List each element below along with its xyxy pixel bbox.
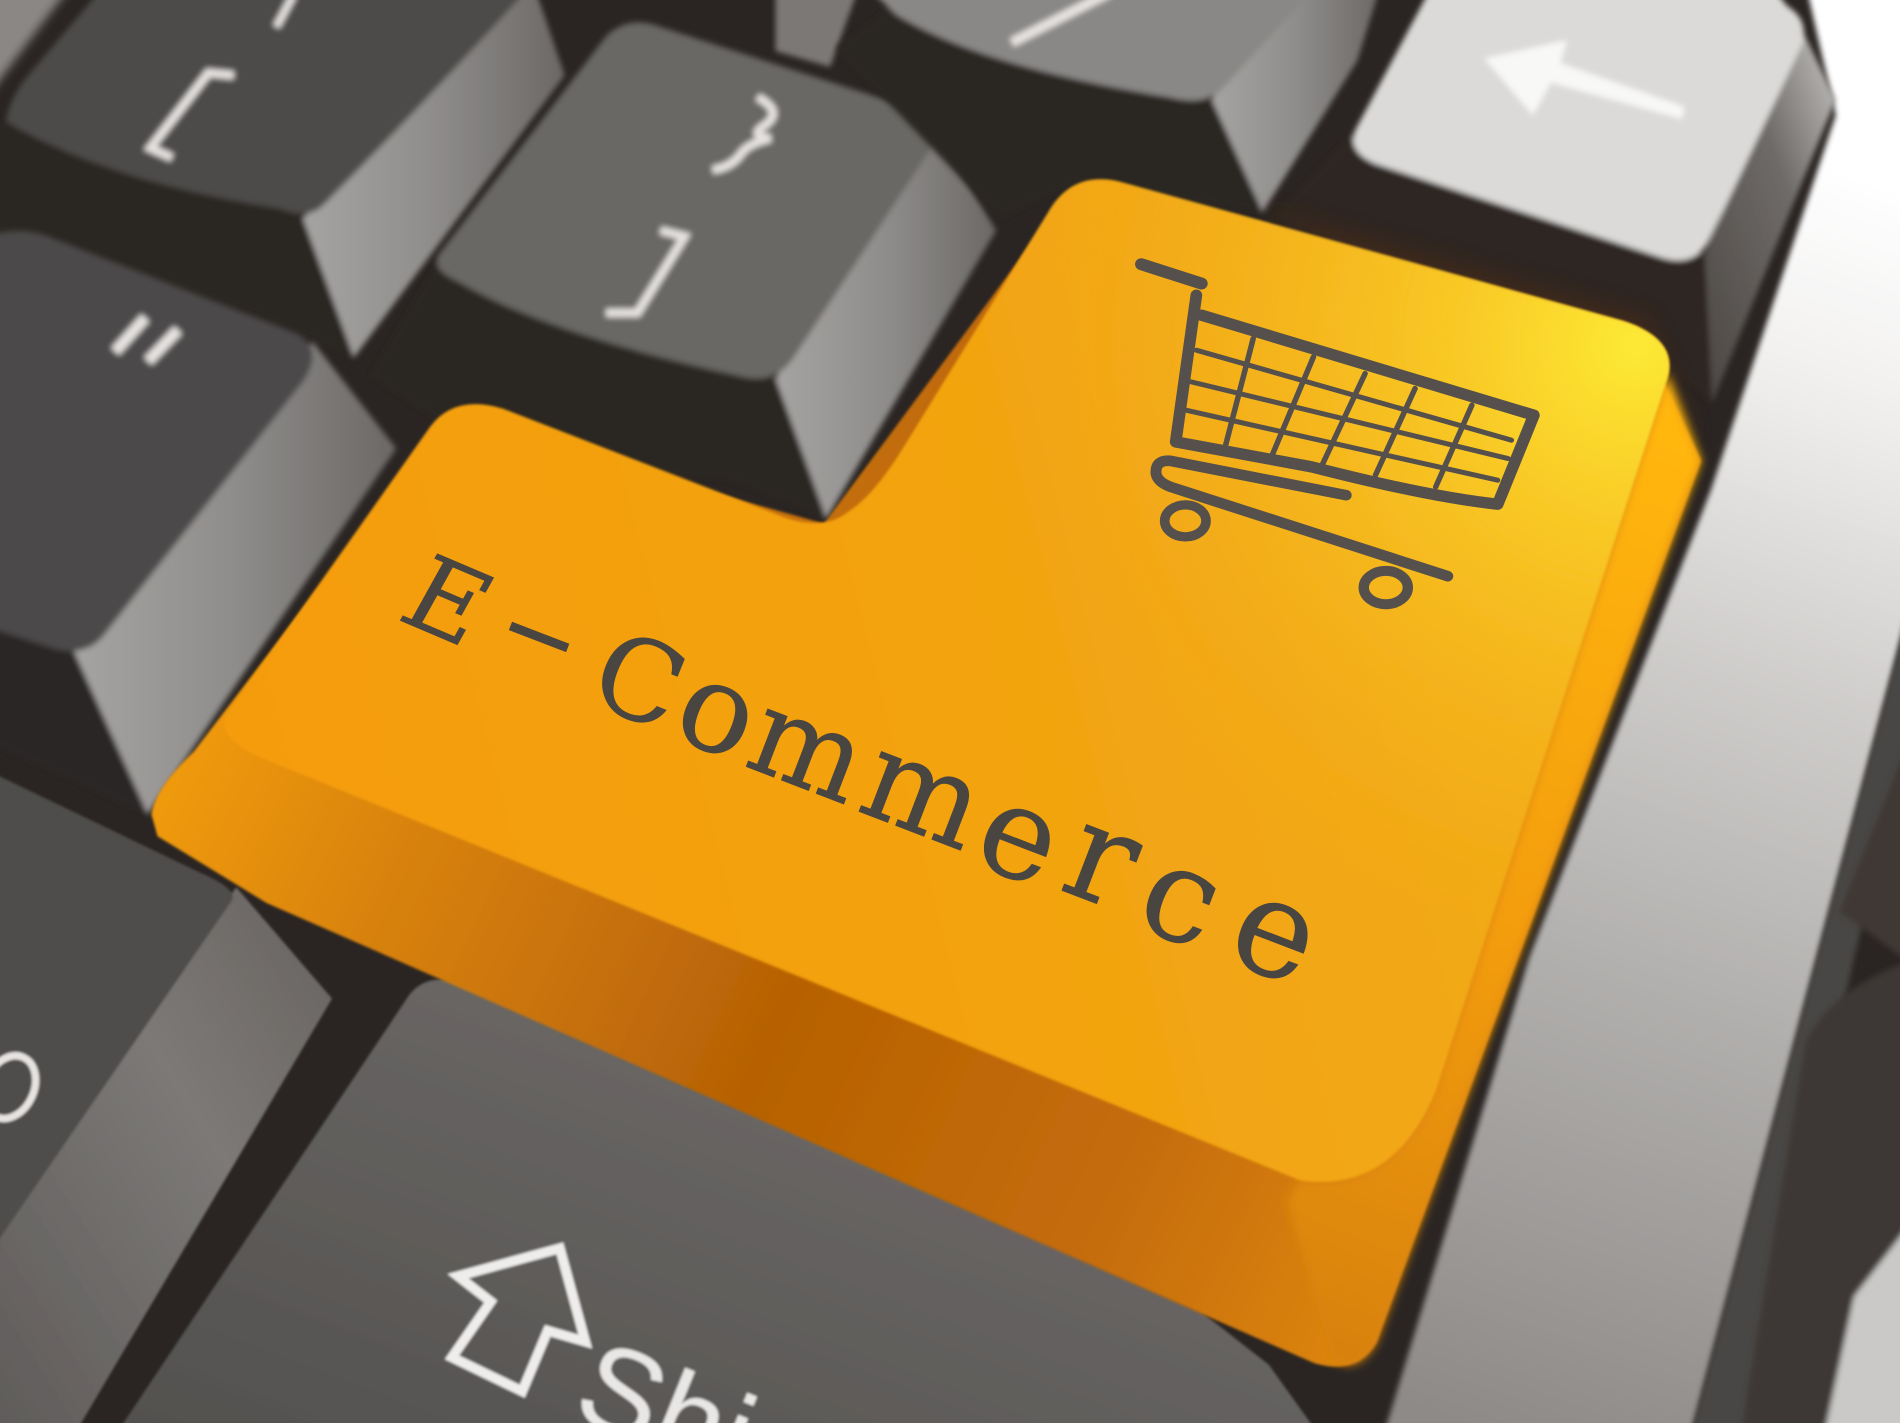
label: E-Commerce <box>383 533 1342 1018</box>
key side walls <box>151 188 1701 1367</box>
key top surface <box>224 179 1669 1182</box>
legend: partial mark <box>276 0 293 27</box>
label: E-Commerce: - <box>482 555 603 703</box>
right key wall <box>1287 372 1701 1365</box>
legend: } <box>712 97 773 170</box>
legend: left arrow <box>1484 40 1684 119</box>
label: E-Commerce: o <box>658 629 779 790</box>
legend: [ <box>150 73 234 158</box>
label: E-Commerce: m <box>731 663 886 832</box>
orange E-Commerce key <box>151 179 1701 1367</box>
legend: ] <box>606 230 685 313</box>
orange key glow <box>1260 206 1696 436</box>
keys: right edge <box>1740 715 1900 1423</box>
key: quote <box>0 231 396 814</box>
icon: shopping cart <box>1141 264 1534 604</box>
label: E-Commerce: e <box>1211 842 1342 1018</box>
legend: shift arrow <box>452 1248 585 1391</box>
legend: double quote <box>115 318 178 361</box>
key: left neighbour, top edge <box>776 0 860 67</box>
legend: / <box>1012 0 1109 43</box>
legend: 0 <box>0 1047 45 1127</box>
label: E-Commerce: r <box>1045 772 1162 943</box>
key: left bracket <box>0 0 565 358</box>
label: E-Commerce: E <box>383 533 512 670</box>
key: zero, lower left <box>0 768 332 1423</box>
key: closing brace and bracket <box>370 23 996 519</box>
label: E-Commerce: m <box>844 703 1005 880</box>
key: slash <box>836 0 1381 218</box>
key: shift <box>114 979 1321 1423</box>
label: E-Commerce: e <box>958 752 1083 918</box>
key: backspace arrow <box>1272 0 1836 403</box>
keyboard groove <box>1689 570 1900 1423</box>
yellow highlight <box>909 179 1669 1091</box>
label: E-Commerce: c <box>1121 812 1244 980</box>
light keyboard frame <box>1381 0 1900 1423</box>
key: far-left corner <box>0 0 73 102</box>
label: E-Commerce: C <box>575 606 703 758</box>
